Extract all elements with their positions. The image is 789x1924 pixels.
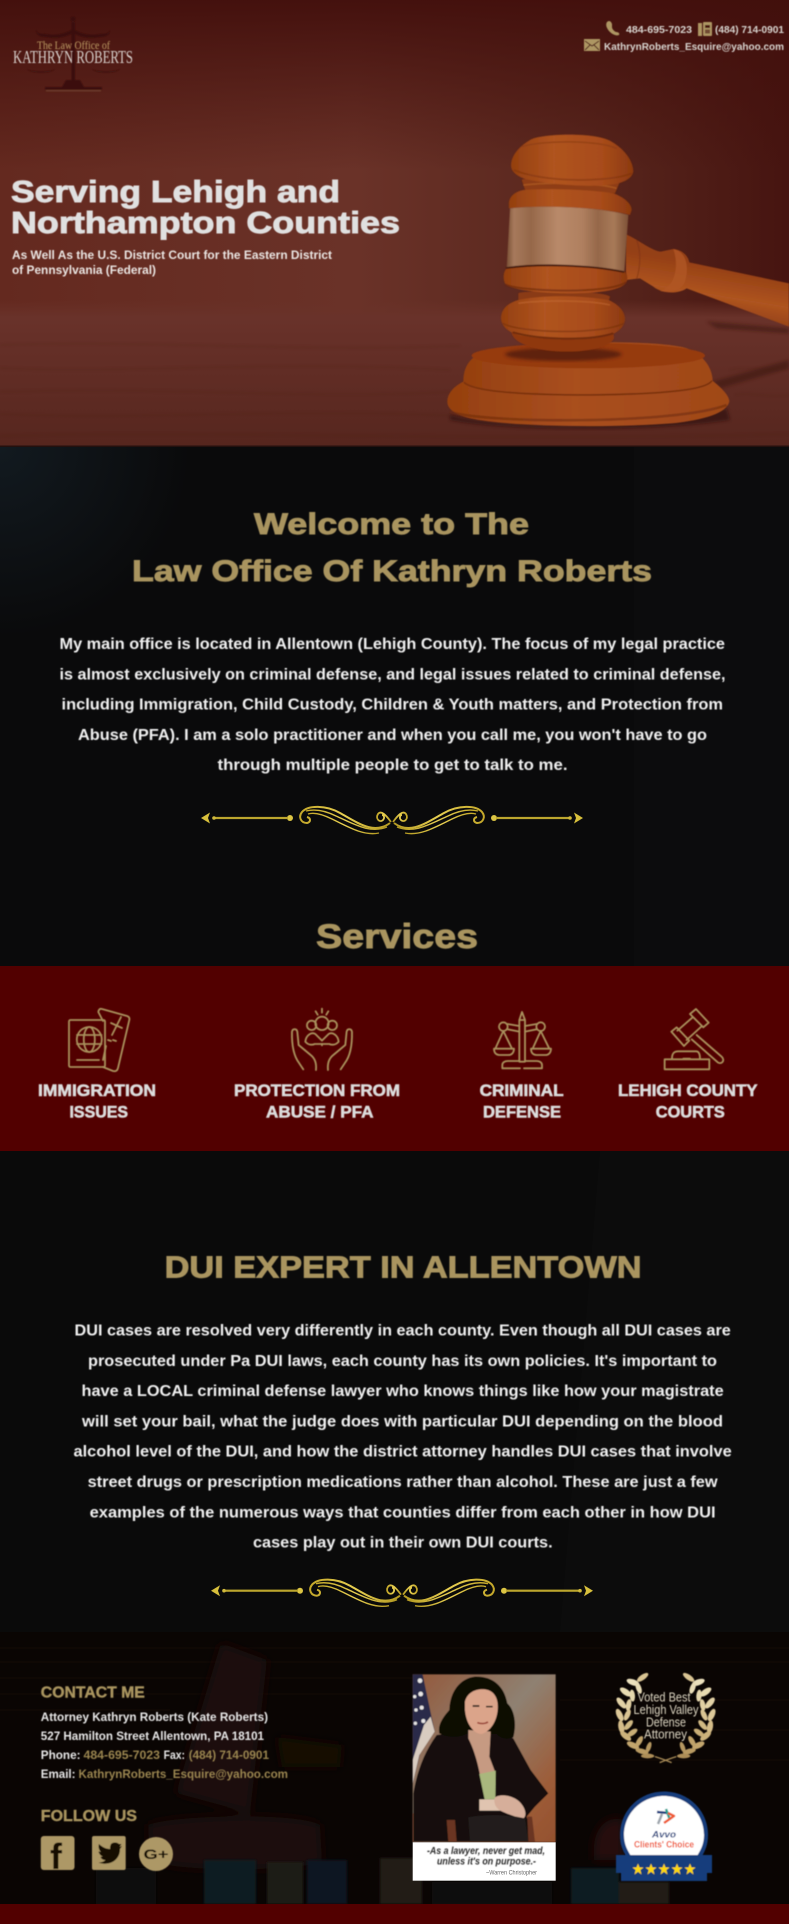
bottom bar — [0, 1904, 789, 1924]
portrait with quote — [413, 1674, 556, 1881]
contact block: KathrynRoberts_Esquire@yahoo.com — [78, 1767, 288, 1781]
service: immigration issues — [38, 1009, 156, 1121]
icon: gavel — [665, 1009, 723, 1069]
DUI paragraph: cases play out in their own DUI courts. — [253, 1534, 553, 1551]
service: criminal defense: DEFENSE — [483, 1103, 561, 1121]
portrait with quote: -As a lawyer, never get mad, — [427, 1846, 545, 1857]
badge: voted best laurel: Defense — [646, 1714, 686, 1730]
gavel head — [501, 135, 633, 352]
welcome paragraph: My main office is located in Allentown (Lehigh County). The focus of my legal practice — [60, 636, 725, 653]
heading: serving counties: Serving Lehigh and — [11, 174, 340, 209]
icon: facebook: f — [50, 1836, 63, 1877]
contact bar: 484-695-7023 — [626, 24, 692, 36]
DUI heading: DUI EXPERT IN ALLENTOWN — [165, 1249, 642, 1284]
contact block: Attorney Kathryn Roberts (Kate Roberts) — [41, 1710, 268, 1724]
contact block: Phone: — [41, 1748, 80, 1762]
divider ornament — [201, 807, 583, 834]
DUI paragraph: examples of the numerous ways that counties differ from each other in how DUI — [90, 1504, 716, 1521]
service: lehigh county courts — [618, 1009, 758, 1121]
panel: footer — [0, 1632, 789, 1904]
welcome paragraph: Abuse (PFA). I am a solo practitioner and when you call me, you won't have to go — [78, 727, 707, 744]
badge: avvo clients choice: Clients' Choice — [634, 1840, 694, 1850]
jacket — [413, 1732, 548, 1842]
flag — [413, 1674, 435, 1783]
panel: hero banner — [0, 0, 789, 447]
badge: avvo clients choice: Avvo — [651, 1830, 676, 1841]
panel: welcome section — [0, 447, 789, 966]
badge: voted best laurel: Lehigh Valley — [634, 1702, 699, 1717]
gavel base — [447, 342, 729, 426]
DUI paragraph: alcohol level of the DUI, and how the district attorney handles DUI cases that involve — [74, 1444, 732, 1461]
icon: passport and ticket — [69, 1009, 129, 1071]
contact block — [41, 1685, 288, 1781]
DUI paragraph: have a LOCAL criminal defense lawyer who knows things like how your magistrate — [82, 1383, 724, 1400]
heading: serving counties — [11, 174, 400, 240]
panel: DUI section — [0, 1151, 789, 1632]
panel: services band — [0, 966, 789, 1151]
DUI paragraph — [74, 1323, 732, 1551]
service: criminal defense — [480, 1012, 564, 1121]
DUI paragraph: will set your bail, what the judge does with particular DUI depending on the blood — [81, 1414, 723, 1431]
contact block: 527 Hamilton Street Allentown, PA 18101 — [41, 1729, 264, 1743]
DUI paragraph: prosecuted under Pa DUI laws, each county has its own policies. It's important to — [88, 1353, 717, 1370]
portrait with quote: ~Warren Christopher — [486, 1870, 537, 1876]
badge: avvo clients choice — [616, 1792, 712, 1881]
divider ornament — [211, 1580, 593, 1606]
badge: voted best laurel: Attorney — [644, 1727, 687, 1742]
service: protection from abuse: PROTECTION FROM — [234, 1082, 400, 1100]
welcome paragraph: through multiple people to get to talk to me. — [218, 757, 568, 774]
illustration: gavel — [447, 135, 789, 429]
service: lehigh county courts: COURTS — [656, 1103, 725, 1121]
icon: hands and people — [292, 1009, 352, 1070]
heading: serving counties: Northampton Counties — [11, 205, 400, 240]
background gavel silhouette — [148, 1643, 624, 1869]
portrait with quote: unless it's on purpose.- — [437, 1856, 537, 1868]
follow us block — [41, 1808, 173, 1877]
shirt — [479, 1771, 496, 1799]
hair — [439, 1677, 515, 1739]
badge: voted best laurel: Voted Best — [638, 1690, 691, 1705]
hero subheading — [12, 248, 332, 277]
welcome heading: Welcome to The — [254, 508, 529, 541]
contact bar: (484) 714-0901 — [715, 24, 784, 36]
welcome paragraph — [60, 636, 726, 774]
hands — [479, 1799, 502, 1811]
hero subheading: of Pennsylvania (Federal) — [12, 263, 156, 277]
service: criminal defense: CRIMINAL — [480, 1082, 564, 1100]
logo — [13, 16, 133, 92]
service: immigration issues: IMMIGRATION — [38, 1082, 156, 1100]
icon: scales of justice — [494, 1012, 551, 1068]
avvo star — [657, 1809, 674, 1824]
contact block: CONTACT ME — [41, 1685, 145, 1702]
service: immigration issues: ISSUES — [70, 1103, 128, 1121]
hero subheading: As Well As the U.S. District Court for the Eastern District — [12, 248, 332, 262]
logo: KATHRYN ROBERTS — [13, 47, 133, 67]
DUI paragraph: street drugs or prescription medications rather than alcohol. These are just a few — [88, 1474, 719, 1491]
contact block: 484-695-7023 — [84, 1748, 160, 1762]
contact bar: KathrynRoberts_Esquire@yahoo.com — [604, 41, 784, 53]
contact block: Email: — [41, 1767, 76, 1781]
service: lehigh county courts: LEHIGH COUNTY — [618, 1082, 758, 1100]
gavel brass band — [507, 207, 628, 272]
welcome heading — [132, 508, 652, 588]
service: protection from abuse — [234, 1009, 400, 1121]
neck and chest — [468, 1730, 495, 1775]
icon: twitter — [92, 1836, 126, 1870]
DUI paragraph: DUI cases are resolved very differently in each county. Even though all DUI cases are — [74, 1323, 731, 1340]
logo: The Law Office of — [37, 38, 110, 52]
service: protection from abuse: ABUSE / PFA — [266, 1103, 374, 1121]
follow us block: FOLLOW US — [41, 1808, 137, 1825]
gavel handle — [626, 234, 789, 327]
contact block: (484) 714-0901 — [189, 1748, 269, 1762]
welcome paragraph: is almost exclusively on criminal defense, and legal issues related to criminal defense, — [60, 666, 726, 683]
contact bar — [584, 21, 784, 53]
icon: google plus: G+ — [144, 1846, 168, 1862]
face — [465, 1689, 498, 1734]
services heading: Services — [316, 918, 478, 956]
table shadows — [707, 322, 789, 388]
icon: fax — [698, 22, 712, 36]
chair — [447, 1817, 535, 1842]
background books — [96, 1858, 669, 1904]
welcome heading: Law Office Of Kathryn Roberts — [132, 555, 652, 588]
welcome paragraph: including Immigration, Child Custody, Children & Youth matters, and Protection from — [62, 696, 723, 714]
icon: phone — [606, 21, 619, 35]
badge: voted best laurel — [614, 1671, 717, 1763]
contact block: Fax: — [164, 1748, 185, 1762]
icon: mail — [584, 39, 600, 51]
